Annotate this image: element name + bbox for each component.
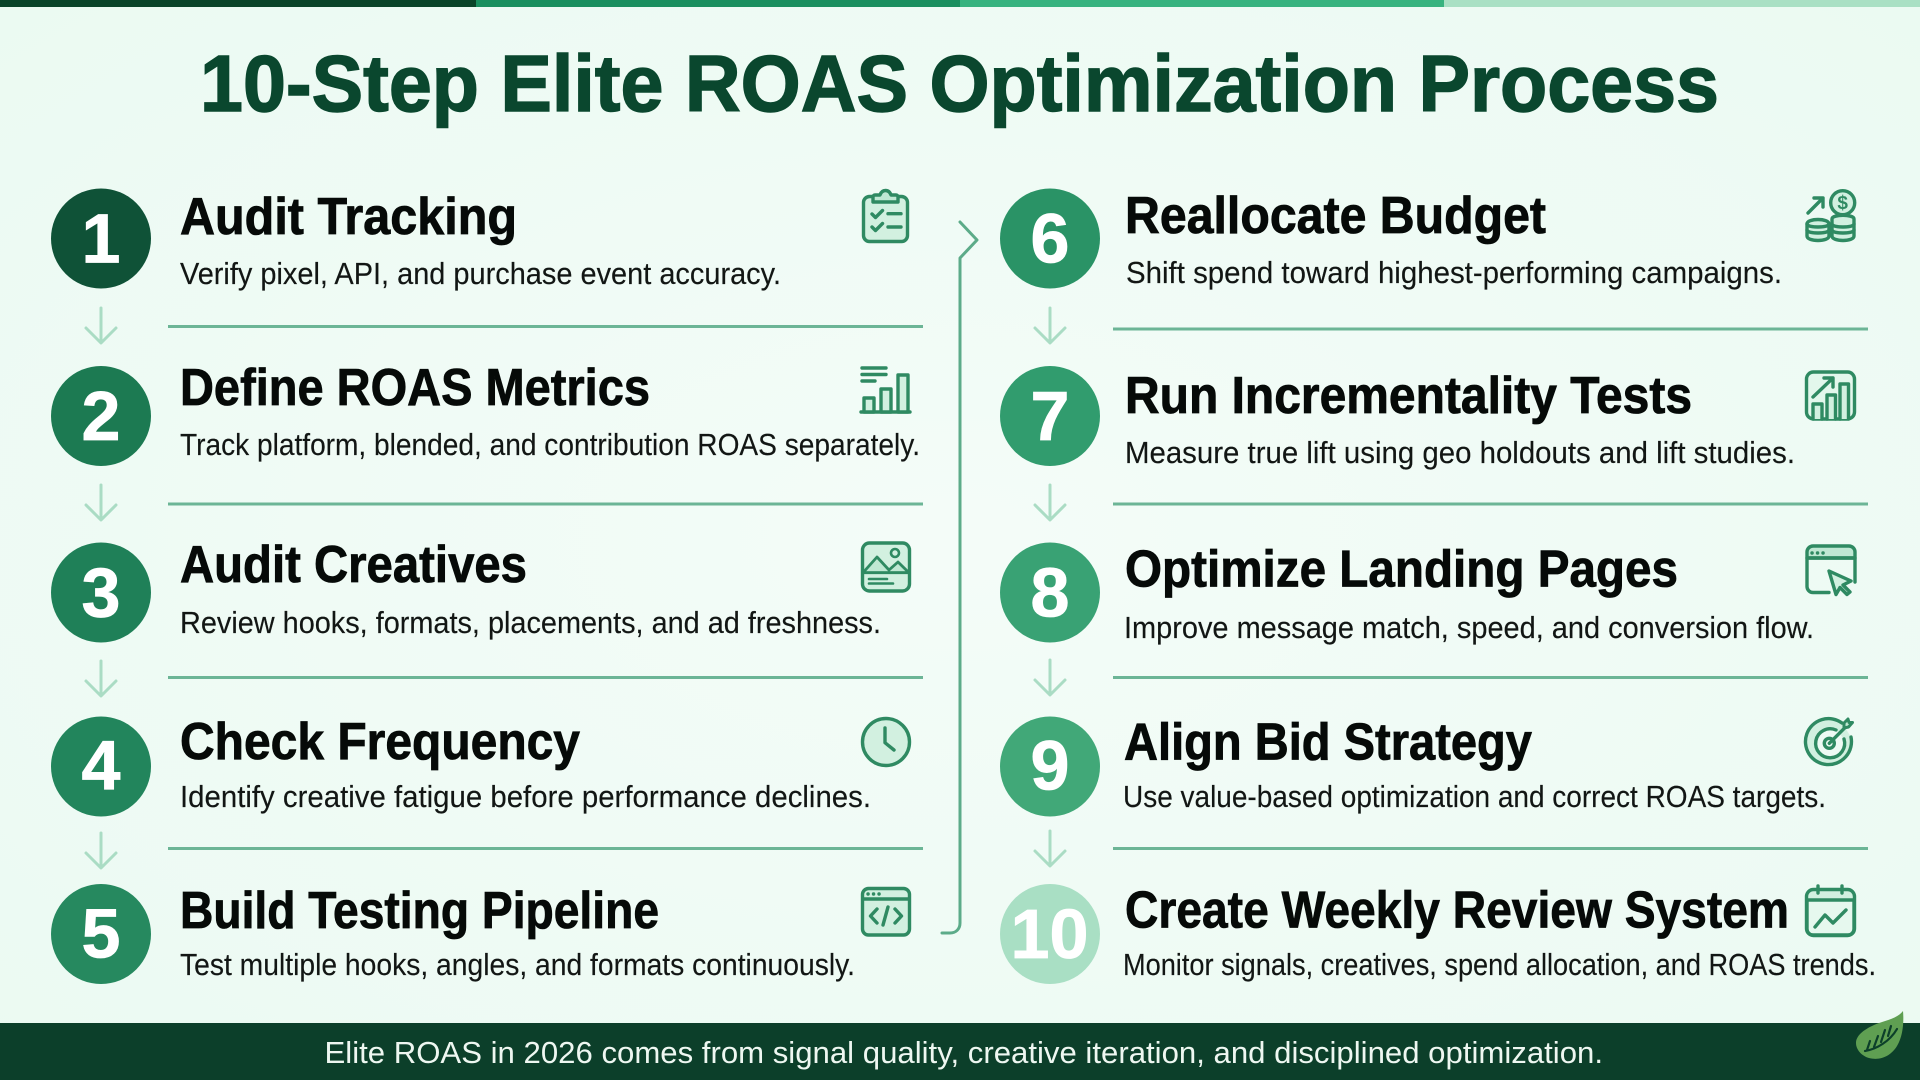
panel: step 5 bbox=[51, 882, 910, 984]
number badge 9: 9 bbox=[1031, 726, 1069, 804]
text: step 5 description: Test multiple hooks, angles, and formats continuously. bbox=[180, 947, 855, 982]
icon: image placeholder bbox=[862, 543, 910, 591]
text: step 6 description: Shift spend toward highest-performing campaigns. bbox=[1126, 255, 1782, 290]
panel: step 7 bbox=[1000, 366, 1854, 470]
panel: step 3 bbox=[51, 536, 910, 642]
icon: target with arrow bbox=[1805, 719, 1852, 765]
heading: Build Testing Pipeline: Build Testing Pipeline bbox=[180, 882, 659, 940]
heading: Align Bid Strategy: Align Bid Strategy bbox=[1124, 714, 1532, 772]
panel: step 1 bbox=[51, 188, 908, 291]
heading: Create Weekly Review System: Create Weekly Review System bbox=[1125, 882, 1789, 940]
panel: step 2 bbox=[51, 359, 920, 466]
number badge 8 bbox=[1000, 542, 1100, 642]
text: step 4 description: Identify creative fatigue before performance declines. bbox=[180, 779, 871, 814]
icon: coins with arrow: $ bbox=[1837, 193, 1848, 214]
number badge 7: 7 bbox=[1031, 377, 1069, 455]
number badge 1 bbox=[51, 188, 151, 288]
panel: step 6 bbox=[1000, 187, 1855, 290]
number badge 3 bbox=[51, 542, 151, 642]
number badge 2 bbox=[51, 366, 151, 466]
heading: Define ROAS Metrics: Define ROAS Metrics bbox=[180, 359, 650, 417]
arrow: step 8 to 9 bbox=[1035, 660, 1065, 695]
number badge 1: 1 bbox=[82, 200, 120, 278]
text: step 3 description: Review hooks, formats, placements, and ad freshness. bbox=[180, 605, 881, 640]
heading: Optimize Landing Pages: Optimize Landing Pages bbox=[1125, 540, 1678, 598]
number badge 7 bbox=[1000, 366, 1100, 466]
icon: browser with cursor bbox=[1807, 546, 1855, 594]
arrow: step 3 to 4 bbox=[86, 661, 116, 696]
panel: step 10 bbox=[1000, 882, 1876, 984]
number badge 6: 6 bbox=[1031, 200, 1069, 278]
heading: Reallocate Budget: Reallocate Budget bbox=[1125, 187, 1546, 245]
icon: code window bbox=[862, 888, 910, 935]
icon: bars with list bbox=[861, 368, 910, 412]
number badge 2: 2 bbox=[82, 377, 120, 455]
arrow: connector from column one to column two bbox=[942, 222, 977, 933]
text: step 1 description: Verify pixel, API, and purchase event accuracy. bbox=[180, 256, 781, 291]
icon: coins with arrow bbox=[1807, 191, 1855, 240]
icon: clipboard checklist bbox=[864, 190, 908, 242]
panel: step 4 bbox=[51, 713, 910, 816]
arrow: step 7 to 8 bbox=[1035, 485, 1065, 520]
number badge 10 bbox=[1000, 884, 1100, 984]
panel: step 9 bbox=[1000, 714, 1852, 816]
number badge 4 bbox=[51, 716, 151, 816]
heading: Audit Tracking: Audit Tracking bbox=[180, 188, 517, 246]
arrow: step 2 to 3 bbox=[86, 485, 116, 520]
number badge 5 bbox=[51, 884, 151, 984]
top colour bar bbox=[0, 0, 1920, 7]
heading: Audit Creatives: Audit Creatives bbox=[180, 536, 527, 594]
text: step 9 description: Use value-based optimization and correct ROAS targets. bbox=[1123, 779, 1826, 814]
title: 10-Step Elite ROAS Optimization Process bbox=[200, 39, 1719, 128]
icon: growth chart bbox=[1806, 372, 1854, 419]
footer banner bbox=[0, 1023, 1920, 1080]
icon: calendar with trend bbox=[1806, 886, 1854, 936]
arrow: step 6 to 7 bbox=[1035, 308, 1065, 343]
footer text: Elite ROAS in 2026 comes from signal quality, creative iteration, and disciplined optimization. bbox=[324, 1035, 1603, 1070]
text: step 7 description: Measure true lift using geo holdouts and lift studies. bbox=[1125, 435, 1795, 470]
number badge 8: 8 bbox=[1031, 554, 1069, 632]
arrow: step 1 to 2 bbox=[86, 308, 116, 343]
number badge 10: 10 bbox=[1010, 895, 1088, 973]
icon: leaf logo bbox=[1856, 1011, 1903, 1059]
number badge 3: 3 bbox=[82, 554, 120, 632]
text: step 8 description: Improve message match, speed, and conversion flow. bbox=[1124, 610, 1814, 645]
arrow: step 9 to 10 bbox=[1035, 831, 1065, 866]
number badge 6 bbox=[1000, 188, 1100, 288]
icon: clock bbox=[862, 718, 910, 766]
heading: Check Frequency: Check Frequency bbox=[180, 713, 580, 771]
number badge 5: 5 bbox=[82, 894, 120, 972]
number badge 4: 4 bbox=[82, 726, 121, 804]
number badge 9 bbox=[1000, 716, 1100, 816]
heading: Run Incrementality Tests: Run Incrementality Tests bbox=[1125, 367, 1692, 425]
panel: step 8 bbox=[1000, 540, 1855, 645]
arrow: step 4 to 5 bbox=[86, 833, 116, 868]
text: step 2 description: Track platform, blended, and contribution ROAS separately. bbox=[180, 427, 920, 462]
